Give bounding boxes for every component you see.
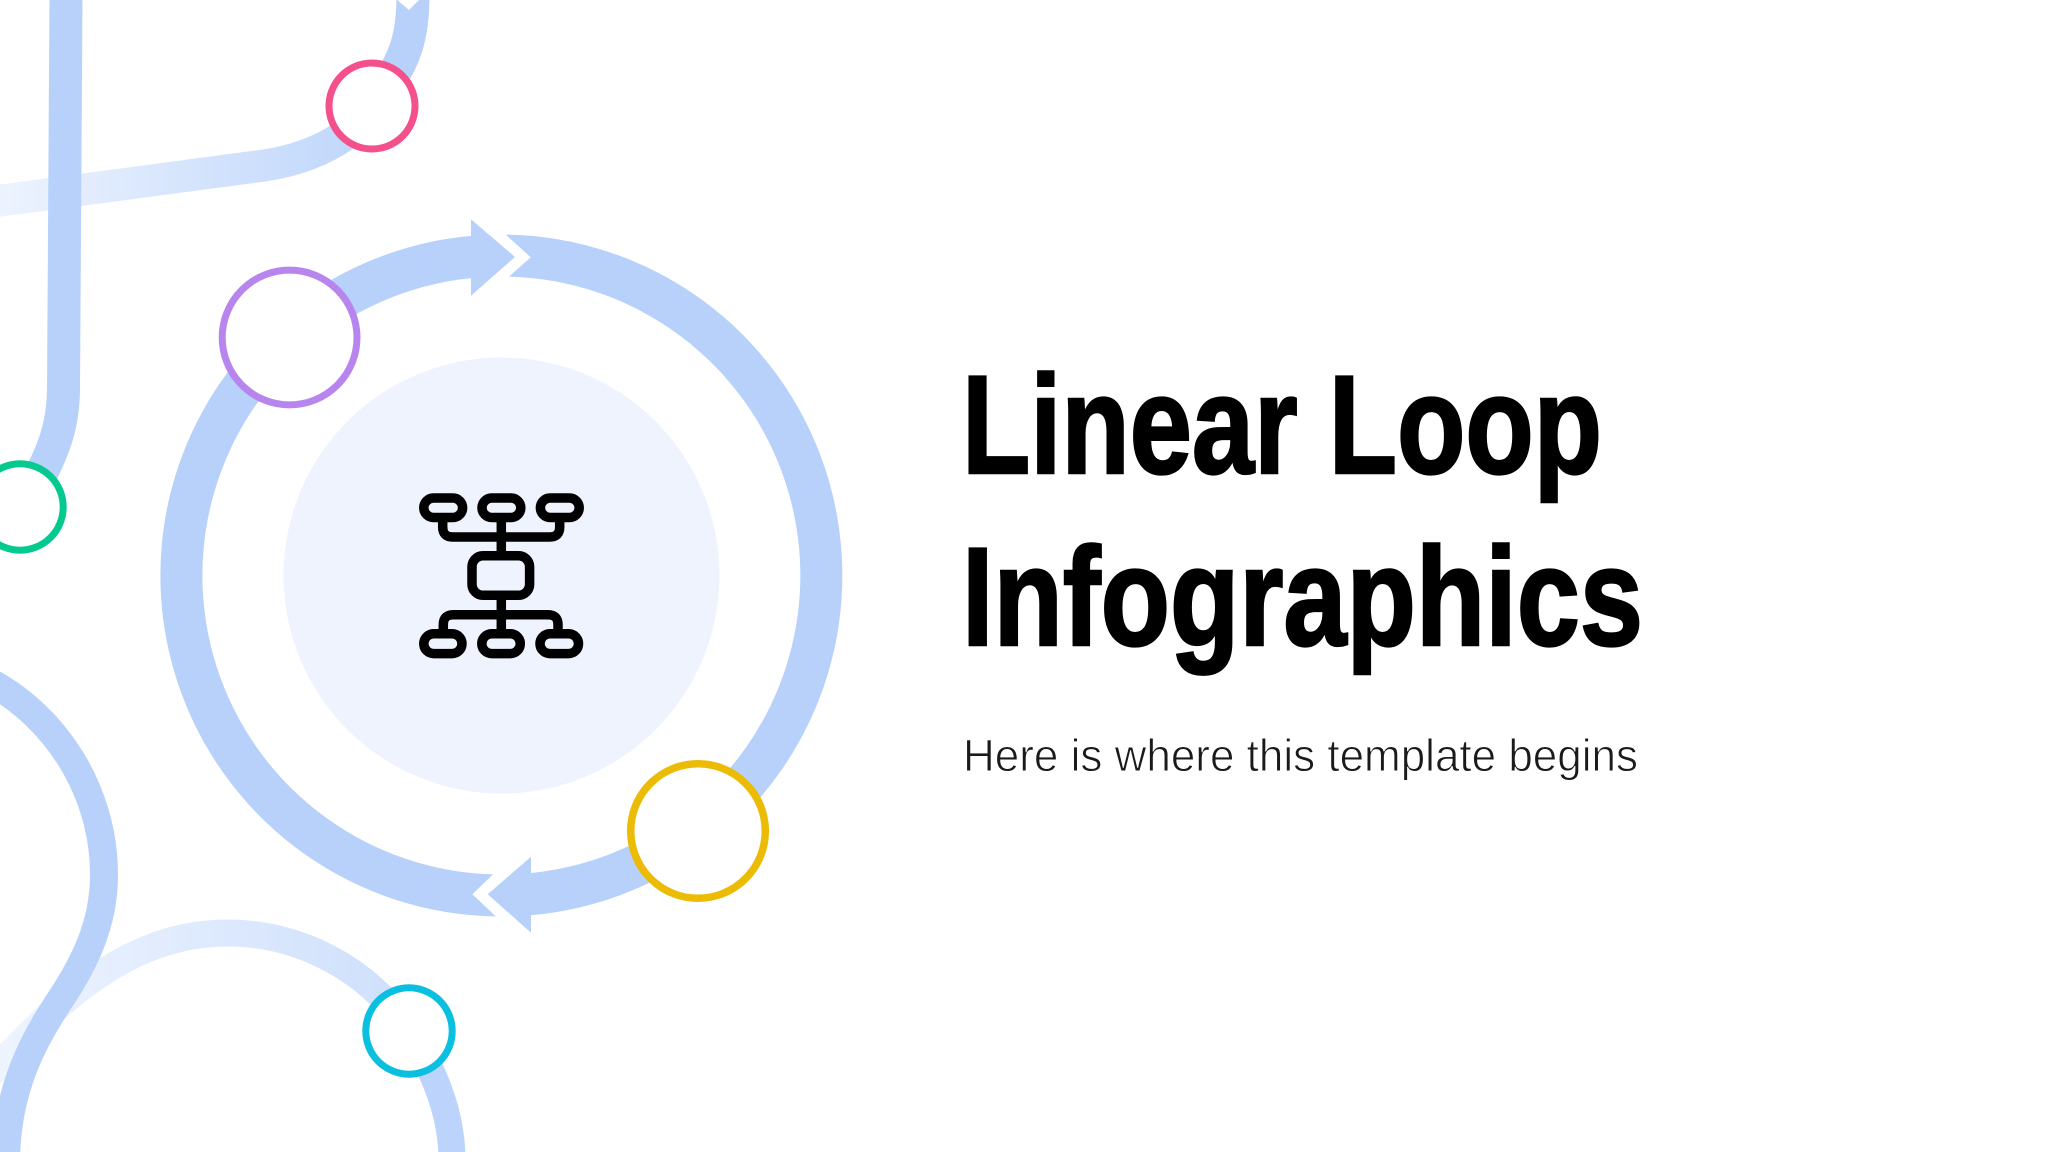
background line: light path to pink node [0,116,372,202]
node: purple circle [222,270,357,405]
loop diagram [160,219,842,933]
title: Linear Loop [962,346,1602,503]
background line: vertical path to green node [30,0,66,495]
loop segment: bottom notch to purple node [160,321,496,916]
node: cyan circle [366,988,452,1074]
node: green circle [0,464,63,550]
title: Infographics [962,518,1643,675]
icon: hierarchy diagram [424,498,579,654]
loop arrow: yellow node to bottom arrowhead [488,812,710,933]
node: pink circle [329,63,415,149]
background line: S-curve at lower left [0,682,104,1152]
loop segment: top notch to yellow node [506,235,842,846]
loop arrow: purple node to top arrowhead [275,219,515,352]
background line: path below cyan node [405,1025,452,1152]
node: yellow circle [631,764,765,898]
background line: path from top edge to pink node [372,0,420,106]
subtitle: Here is where this template begins [963,730,1638,781]
center disc [284,358,720,794]
background line: light arc to cyan node [0,933,409,1075]
title [962,346,1643,675]
